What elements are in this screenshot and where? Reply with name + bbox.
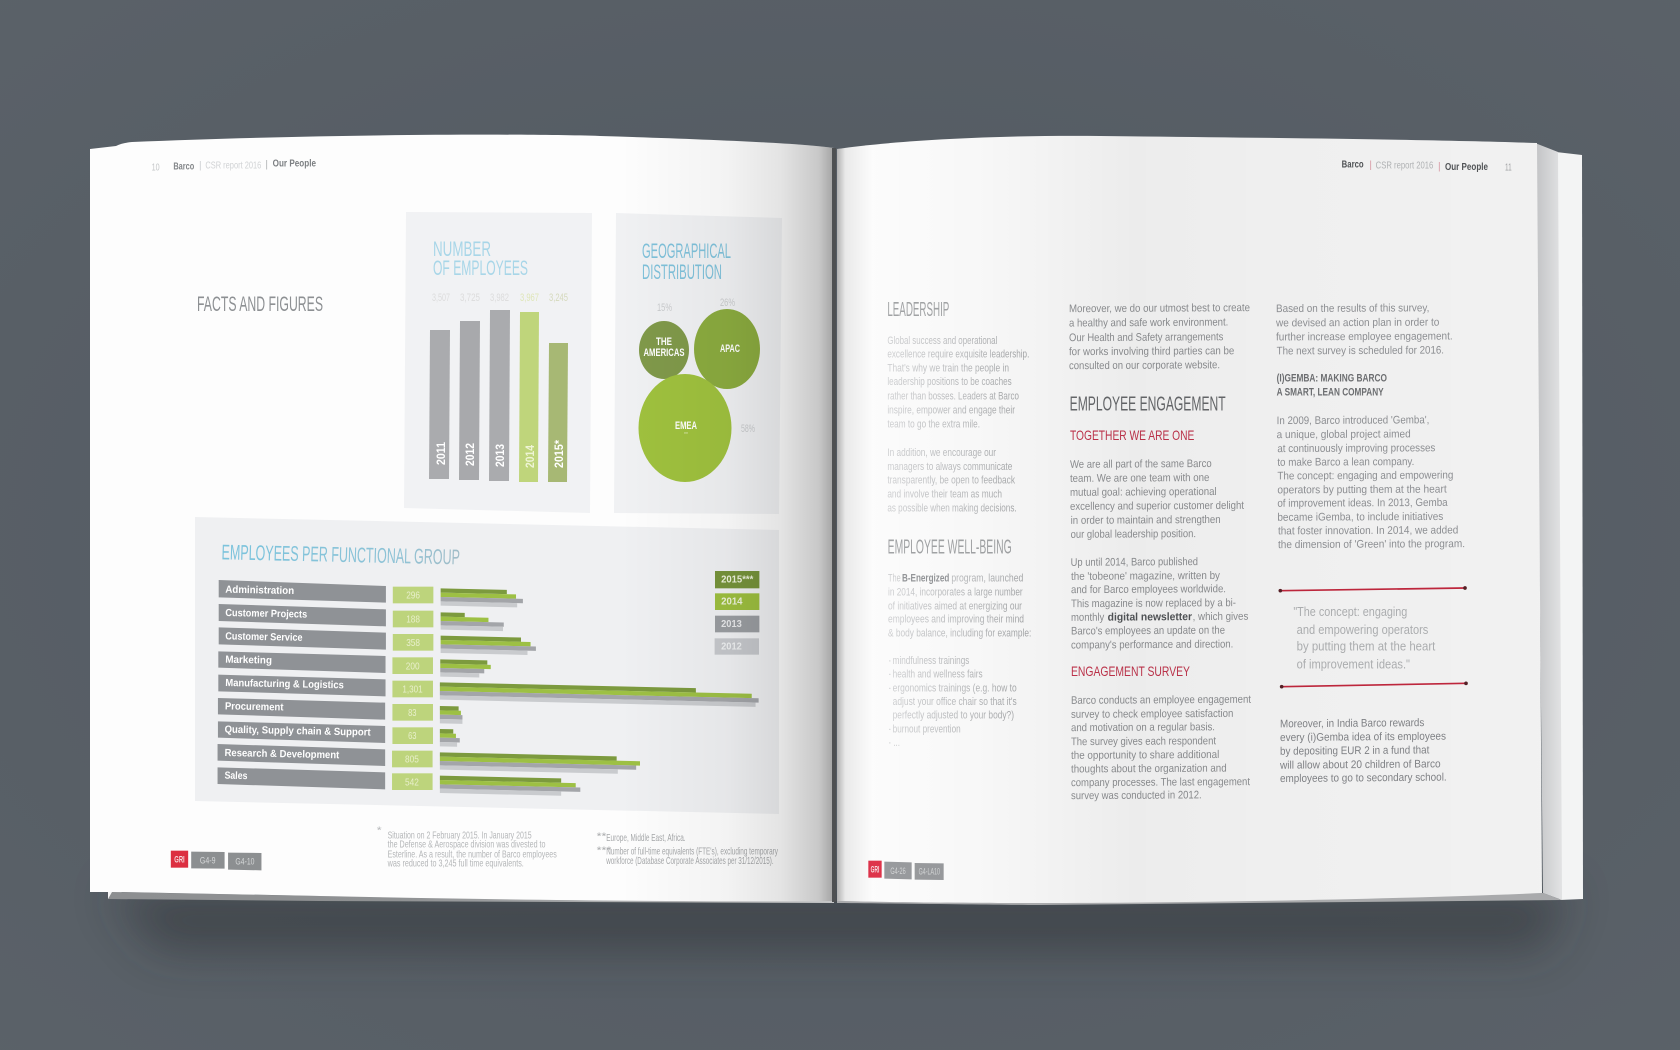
bubble chart: regions: 58% bbox=[741, 423, 755, 435]
text block: well-being: · bbox=[888, 737, 892, 749]
right page column 2: health and employee engagement bbox=[1069, 302, 1251, 802]
right page header: | bbox=[1369, 160, 1372, 171]
subheading: engagement survey: ENGAGEMENT SURVEY bbox=[1071, 664, 1190, 679]
text block: safe work environment: Our Health and Safety arrangements bbox=[1069, 331, 1224, 344]
GRI tags: GRI bbox=[174, 855, 185, 865]
footer right: GRI tags: G4-LA10 bbox=[919, 867, 940, 877]
horizontal bars: Marketing bbox=[440, 659, 491, 678]
text block: together we are one: our global leadership position. bbox=[1071, 528, 1196, 541]
text block: leadership bbox=[887, 335, 1029, 515]
text block: leadership: and involve their team as much bbox=[887, 489, 1002, 501]
text block: gemba: that foster innovation. In 2014, we added bbox=[1278, 524, 1458, 537]
panel: number of employees: OF EMPLOYEES bbox=[433, 257, 528, 280]
text block: gemba bbox=[1277, 414, 1465, 551]
subheading: gemba: (I)GEMBA: MAKING BARCO bbox=[1277, 373, 1387, 385]
horizontal bars: Sales bbox=[440, 776, 580, 796]
text block: gemba: operators by putting them at the heart bbox=[1277, 484, 1447, 496]
right page header: CSR report 2016 bbox=[1376, 160, 1434, 171]
text block: india gemba rewards: by depositing EUR 2 in a fund that bbox=[1280, 744, 1429, 758]
text block: well-being: employees and improving their mind bbox=[888, 614, 1024, 626]
text block: engagement survey: and motivation on a regular basis. bbox=[1071, 721, 1215, 734]
text block: india gemba rewards: employees to go to secondary school. bbox=[1280, 772, 1447, 785]
text block: digital newsletter: company's performance and direction. bbox=[1071, 639, 1233, 652]
text block: digital newsletter: Barco's employees an update on the bbox=[1071, 625, 1225, 638]
GRI tags bbox=[171, 851, 261, 870]
row labels: Manufacturing & Logistics bbox=[225, 678, 344, 691]
text block: well-being: The bbox=[888, 573, 901, 585]
bar chart: employees per year: 3,507 bbox=[432, 292, 450, 304]
row labels: Administration bbox=[225, 584, 294, 597]
footnotes: regions and FTE bbox=[597, 832, 778, 867]
text block: together we are one bbox=[1070, 458, 1244, 541]
text block: digital newsletter bbox=[1071, 556, 1249, 652]
subheading: together we are one: TOGETHER WE ARE ONE bbox=[1070, 428, 1194, 443]
text block: engagement survey: the opportunity to share additional bbox=[1071, 749, 1219, 762]
bubble chart: regions: EMEA bbox=[675, 420, 697, 432]
text block: leadership: That's why we train the people in bbox=[887, 362, 1009, 374]
text block: india gemba rewards: every (i)Gemba idea of its employees bbox=[1280, 731, 1446, 744]
bar chart: employees per year: 2014 bbox=[523, 445, 537, 468]
text block: digital newsletter: This magazine is now replaced by a bi- bbox=[1071, 597, 1236, 610]
bar chart: employees per year: 3,967 bbox=[520, 292, 539, 304]
text block: well-being: · bbox=[888, 669, 892, 681]
text block: digital newsletter: Up until 2014, Barco published bbox=[1071, 556, 1198, 569]
text block: gemba: the dimension of 'Green' into the program. bbox=[1278, 538, 1465, 551]
text block: well-being: in 2014, incorporates a large number bbox=[888, 586, 1023, 598]
right page header: Our People bbox=[1445, 162, 1488, 173]
right page column 1: leadership and well-being bbox=[887, 299, 1031, 749]
left page header bbox=[152, 159, 316, 174]
row labels: Customer Projects bbox=[225, 608, 307, 620]
text block: digital newsletter: the 'tobeone' magazine, written by bbox=[1071, 570, 1220, 583]
text block: leadership: In addition, we encourage our bbox=[887, 447, 996, 459]
bubble chart: regions: APAC bbox=[720, 343, 740, 355]
text block: india gemba rewards: Moreover, in India Barco rewards bbox=[1280, 717, 1425, 730]
text block: well-being: B-Energized bbox=[902, 573, 949, 585]
text block: survey results: we devised an action plan in order to bbox=[1275, 317, 1439, 329]
text block: well-being: ... bbox=[893, 737, 900, 749]
text block: gemba: to make Barco a lean company. bbox=[1277, 456, 1414, 469]
text block: leadership: as possible when making decisions. bbox=[887, 503, 1017, 515]
legend: years: 2012 bbox=[721, 641, 742, 652]
bubble chart: regions: 15% bbox=[657, 302, 672, 314]
horizontal bars: Customer Service bbox=[441, 636, 536, 655]
text block: well-being: health and wellness fairs bbox=[893, 669, 983, 681]
text block: engagement survey: survey was conducted in 2012. bbox=[1071, 789, 1202, 802]
text block: well-being: · bbox=[888, 682, 892, 694]
right page header bbox=[1342, 159, 1512, 173]
text block: engagement survey bbox=[1071, 694, 1251, 802]
right page column 3 and header bbox=[1275, 159, 1512, 785]
row labels: Sales bbox=[224, 770, 248, 782]
text block: well-being: · bbox=[888, 723, 892, 735]
panel: employees per functional group bbox=[195, 517, 779, 814]
text block: leadership: team to go the extra mile. bbox=[887, 418, 980, 430]
horizontal bars: Administration bbox=[441, 588, 523, 608]
text block: safe work environment: a healthy and safe work environment. bbox=[1069, 317, 1228, 330]
text block: gemba: of improvement ideas. In 2013, Gemba bbox=[1277, 497, 1448, 510]
text block: well-being: · bbox=[888, 655, 892, 667]
text block: together we are one: team. We are one team with one bbox=[1070, 472, 1209, 485]
text block: india gemba rewards bbox=[1279, 717, 1447, 785]
value boxes: 200 bbox=[406, 661, 420, 672]
text block: digital newsletter: and for Barco employees worldwide. bbox=[1071, 583, 1226, 596]
value boxes: 805 bbox=[405, 754, 419, 765]
row labels: Marketing bbox=[225, 654, 272, 666]
bar chart: employees per year: 2011 bbox=[434, 442, 448, 465]
text block: gemba: In 2009, Barco introduced 'Gemba', bbox=[1277, 414, 1429, 427]
left page header: Barco bbox=[173, 161, 194, 172]
text block: engagement survey: survey to check employee satisfaction bbox=[1071, 708, 1233, 721]
text block: well-being: burnout prevention bbox=[893, 723, 961, 735]
text block: engagement survey: company processes. The last engagement bbox=[1071, 776, 1250, 789]
value boxes: 542 bbox=[405, 777, 419, 788]
footer left: GRI tags and footnotes bbox=[171, 826, 778, 870]
footnote: situation: * bbox=[377, 826, 382, 836]
row labels: Quality, Supply chain & Support bbox=[224, 724, 371, 738]
bubble chart: regions: AMERICAS bbox=[644, 347, 684, 359]
text block: well-being: mindfulness trainings bbox=[893, 655, 970, 667]
text block: safe work environment: consulted on our corporate website. bbox=[1069, 359, 1220, 372]
right page header: | bbox=[1438, 161, 1441, 172]
text block: leadership: Global success and operational bbox=[887, 335, 997, 347]
pull quote: and empowering operators bbox=[1297, 623, 1428, 637]
heading: employees per functional group: EMPLOYEES PER FUNCTIONAL GROUP bbox=[221, 540, 460, 569]
panel: geographical distribution bbox=[614, 213, 782, 514]
right page header: 11 bbox=[1505, 162, 1512, 173]
text block: gemba: at continuously improving processes bbox=[1277, 442, 1436, 455]
text block: together we are one: in order to maintain and strengthen bbox=[1071, 514, 1221, 527]
text block: survey results: Based on the results of this survey, bbox=[1276, 302, 1429, 315]
right page bbox=[837, 136, 1542, 903]
GRI tags: G4-10 bbox=[235, 857, 255, 867]
pull quote: by putting them at the heart bbox=[1297, 640, 1436, 654]
horizontal bars: Research and Development bbox=[440, 752, 640, 774]
bar chart: employees per year: 3,245 bbox=[549, 292, 568, 304]
text block: together we are one: excellency and superior customer delight bbox=[1070, 500, 1244, 513]
text block: gemba: The concept: engaging and empowering bbox=[1277, 470, 1453, 482]
left page header: | bbox=[265, 160, 268, 171]
left page bbox=[90, 135, 834, 901]
heading: geographical distribution: GEOGRAPHICAL bbox=[642, 240, 731, 263]
horizontal bars: Quality, Supply chain and Support bbox=[440, 729, 460, 747]
text block: together we are one: We are all part of the same Barco bbox=[1070, 458, 1212, 471]
page block edge bbox=[1535, 143, 1562, 900]
text block: well-being: ergonomics trainings (e.g. how to bbox=[893, 682, 1017, 694]
text block: leadership: excellence require exquisite leadership. bbox=[887, 348, 1029, 360]
footer right: GRI tags: GRI bbox=[871, 865, 879, 875]
footer right: GRI tags: G4-26 bbox=[890, 866, 906, 876]
pull quote: of improvement ideas." bbox=[1297, 657, 1410, 671]
value boxes: 63 bbox=[408, 731, 417, 742]
row labels: Customer Service bbox=[225, 631, 303, 644]
heading: employee engagement: EMPLOYEE ENGAGEMENT bbox=[1070, 393, 1226, 416]
pull quote bbox=[1278, 586, 1468, 688]
subheading: gemba: A SMART, LEAN COMPANY bbox=[1277, 386, 1384, 398]
value boxes: 188 bbox=[406, 614, 420, 625]
value boxes bbox=[392, 587, 433, 790]
bubble chart: regions: THE bbox=[656, 336, 672, 348]
section heading: facts and figures: FACTS AND FIGURES bbox=[197, 293, 323, 316]
bubble chart: regions bbox=[638, 297, 760, 482]
legend: years bbox=[715, 571, 759, 655]
text block: leadership: leadership positions to be coaches bbox=[887, 376, 1012, 388]
value boxes: 296 bbox=[406, 590, 420, 601]
text block: safe work environment: for works involving third parties can be bbox=[1069, 345, 1234, 358]
text block: well-being: of initiatives aimed at energizing our bbox=[888, 600, 1022, 612]
text block: survey results bbox=[1275, 302, 1453, 357]
row labels: Research & Development bbox=[224, 748, 340, 761]
bubble chart: regions: ** bbox=[684, 432, 688, 438]
text block: safe work environment: Moreover, we do our utmost best to create bbox=[1069, 302, 1250, 315]
right page header: Barco bbox=[1342, 159, 1364, 170]
text block: leadership: managers to always communicate bbox=[887, 461, 1012, 473]
bar chart: employees per year: 2012 bbox=[463, 443, 477, 466]
text block: digital newsletter: monthly bbox=[1071, 612, 1105, 624]
horizontal bars: Manufacturing and Logistics bbox=[440, 682, 759, 707]
left page header: CSR report 2016 bbox=[205, 160, 262, 171]
footer right: GRI tags bbox=[868, 861, 944, 880]
heading: employee well-being: EMPLOYEE WELL-BEING bbox=[888, 536, 1012, 558]
heading: number of employees: NUMBER bbox=[433, 238, 491, 261]
footnote: situation: the Defense & Aerospace division was divested to bbox=[388, 840, 546, 850]
panel: number of employees bbox=[404, 212, 592, 513]
back cover edge bbox=[1556, 152, 1583, 900]
text block: leadership: transparently, be open to feedback bbox=[887, 475, 1015, 487]
bar chart: employees per year: 3,725 bbox=[460, 292, 480, 304]
left page header: | bbox=[199, 161, 202, 172]
panel: geographical distribution: DISTRIBUTION bbox=[642, 261, 722, 284]
GRI tags: G4-9 bbox=[200, 856, 215, 866]
horizontal bars: Customer Projects bbox=[441, 612, 504, 631]
footnote: situation bbox=[377, 826, 557, 869]
text block: leadership: rather than bosses. Leaders at Barco bbox=[887, 390, 1019, 402]
footnote: situation: was reduced to 3,245 full time equivalents. bbox=[387, 859, 524, 869]
right page column 1: leadership and well-being: LEADERSHIP bbox=[887, 299, 949, 321]
text block: engagement survey: thoughts about the organization and bbox=[1071, 763, 1227, 776]
footnotes: regions and FTE: ** bbox=[597, 832, 607, 842]
bar chart: employees per year bbox=[429, 292, 568, 482]
text block: well-being: & body balance, including for example: bbox=[888, 628, 1031, 640]
value boxes: 358 bbox=[406, 638, 420, 649]
text block: gemba: became iGemba, to include initiatives bbox=[1277, 511, 1444, 524]
bubble chart: regions: 26% bbox=[720, 297, 735, 309]
text block: survey results: The next survey is scheduled for 2016. bbox=[1277, 345, 1444, 357]
left page header: Our People bbox=[273, 159, 316, 170]
text block: engagement survey: Barco conducts an employee engagement bbox=[1071, 694, 1251, 707]
footnotes: regions and FTE: Europe, Middle East, Africa. bbox=[606, 833, 686, 844]
subheading: gemba bbox=[1277, 373, 1387, 398]
text block: survey results: further increase employee engagement. bbox=[1276, 331, 1453, 343]
horizontal bars: Procurement bbox=[440, 706, 462, 724]
footnotes: regions and FTE: *** bbox=[597, 846, 612, 856]
footnotes: regions and FTE: Number of full-time equivalents (FTE's), excluding temporary bbox=[606, 847, 778, 857]
text block: india gemba rewards: will allow about 20 children of Barco bbox=[1279, 758, 1441, 772]
row labels bbox=[218, 580, 386, 789]
value boxes: 83 bbox=[408, 708, 417, 719]
text block: leadership: inspire, empower and engage their bbox=[887, 404, 1015, 416]
text block: well-being bbox=[888, 573, 1031, 749]
text block: well-being: program, launched bbox=[951, 573, 1023, 585]
legend: years: 2013 bbox=[721, 619, 742, 630]
row labels: Procurement bbox=[225, 701, 284, 713]
value boxes: 1,301 bbox=[402, 684, 423, 695]
bar chart: employees per year: 2015* bbox=[552, 440, 566, 468]
footnote: situation: Situation on 2 February 2015. In January 2015 bbox=[388, 831, 532, 841]
text block: together we are one: mutual goal: achieving operational bbox=[1070, 486, 1217, 499]
text block: safe work environment bbox=[1069, 302, 1250, 372]
left page header: 10 bbox=[152, 163, 160, 174]
legend: years: 2014 bbox=[721, 596, 743, 607]
footnotes: regions and FTE: workforce (Database Corporate Associates per 31/12/2015). bbox=[606, 856, 774, 867]
pull quote: "The concept: engaging bbox=[1293, 605, 1407, 619]
legend: years: 2015*** bbox=[721, 574, 754, 585]
text block: well-being: adjust your office chair so that it's bbox=[893, 696, 1017, 708]
text block: engagement survey: The survey gives each respondent bbox=[1071, 735, 1216, 748]
text block: well-being: perfectly adjusted to your body?) bbox=[893, 710, 1014, 722]
bar chart: employees per year: 2013 bbox=[493, 444, 507, 467]
footnote: situation: Esterline. As a result, the number of Barco employees bbox=[388, 850, 557, 860]
text block: digital newsletter: digital newsletter bbox=[1108, 611, 1193, 624]
text block: gemba: a unique, global project aimed bbox=[1277, 428, 1411, 441]
text block: digital newsletter: , which gives bbox=[1193, 611, 1249, 623]
bar chart: employees per year: 3,982 bbox=[490, 292, 509, 304]
